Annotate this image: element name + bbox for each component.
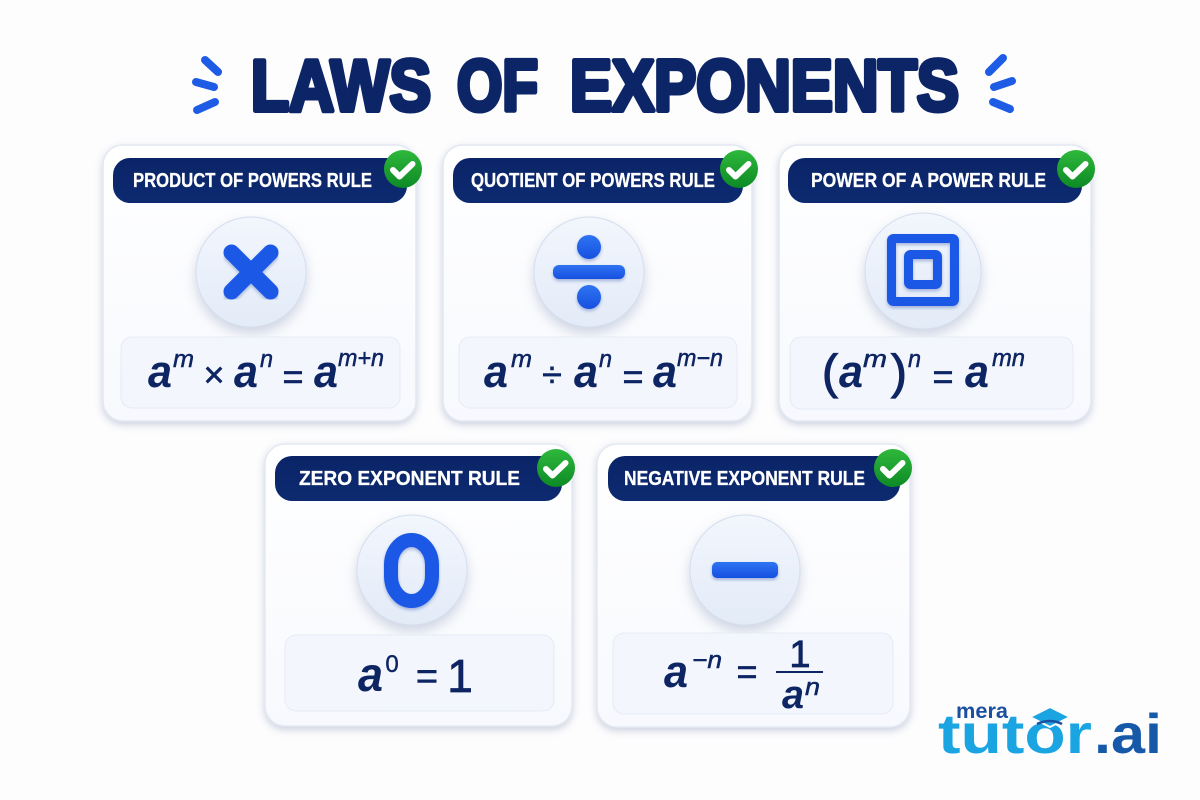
formula box: m−n: [677, 345, 723, 372]
formula box: =: [736, 651, 758, 692]
formula box: a: [148, 346, 172, 397]
panel: negative exponent rule: [597, 444, 912, 727]
icon: nested squares: [865, 213, 981, 329]
formula box: n: [908, 346, 921, 373]
icon: zero: [357, 515, 467, 625]
title text: OF: [457, 46, 538, 126]
formula box: −n: [692, 647, 722, 674]
icon: green check badge: [720, 150, 758, 188]
formula box: n: [260, 346, 273, 373]
panel: power of a power rule: [779, 145, 1095, 421]
icon: minus sign: [690, 515, 800, 625]
heading pill: ZERO EXPONENT RULE: [299, 468, 520, 490]
heading pill: [608, 456, 900, 501]
formula box: =: [932, 356, 954, 397]
panel: quotient of powers rule: [443, 145, 758, 421]
heading pill: [275, 456, 562, 501]
formula box: [613, 633, 893, 717]
formula box: m: [173, 346, 194, 373]
formula box: [790, 337, 1073, 409]
formula box: a: [664, 646, 688, 697]
logo: mera tutor.ai: tutor: [938, 702, 1092, 765]
formula box: (: [822, 345, 838, 398]
heading pill: PRODUCT OF POWERS RULE: [133, 170, 372, 192]
formula box: 1: [789, 634, 811, 676]
icon: right sparkle dashes: [989, 58, 1012, 109]
formula box: a: [574, 346, 598, 397]
formula box: 1: [447, 650, 473, 702]
formula box: =: [416, 656, 438, 698]
formula box: a: [358, 649, 383, 702]
card background: [779, 145, 1091, 421]
formula box: [285, 635, 554, 711]
heading pill: [113, 158, 407, 203]
formula box: 0: [385, 651, 399, 678]
formula box: a: [484, 346, 508, 397]
title text: EXPONENTS: [570, 46, 959, 126]
formula box: a: [234, 346, 258, 397]
card background: [443, 145, 752, 421]
heading pill: NEGATIVE EXPONENT RULE: [624, 468, 865, 490]
formula box: [121, 337, 400, 408]
logo: mera tutor.ai: .ai: [1094, 702, 1162, 765]
title text: [251, 46, 959, 126]
formula box: m: [863, 346, 887, 373]
formula box: m: [511, 346, 532, 373]
formula box: a: [839, 346, 863, 397]
formula box: ÷: [542, 354, 562, 395]
icon: green check badge: [874, 449, 912, 487]
card background: [103, 145, 416, 421]
formula box: =: [282, 356, 304, 397]
formula box: a: [653, 346, 677, 397]
icon: multiplication sign: [196, 217, 306, 327]
heading pill: [788, 158, 1082, 203]
heading pill: POWER OF A POWER RULE: [811, 170, 1046, 192]
icon: graduation cap: [1030, 707, 1070, 727]
formula box: a: [782, 673, 804, 717]
heading pill: [453, 158, 743, 203]
panel: zero exponent rule: [265, 444, 575, 726]
formula box: n: [805, 674, 820, 701]
formula box: ×: [203, 354, 225, 395]
card background: [265, 444, 572, 726]
title text: LAWS: [251, 46, 431, 126]
icon: division sign: [534, 217, 644, 327]
logo: mera tutor.ai: [938, 700, 1162, 765]
formula box: ): [891, 345, 907, 398]
title: [196, 46, 1012, 126]
icon: green check badge: [1057, 150, 1095, 188]
panel: product of powers rule: [103, 145, 422, 421]
formula box: [459, 337, 737, 408]
icon: green check badge: [384, 150, 422, 188]
heading pill: QUOTIENT OF POWERS RULE: [471, 170, 715, 192]
formula box: a: [314, 346, 338, 397]
formula box: n: [599, 346, 612, 373]
icon: left sparkle dashes: [196, 60, 218, 110]
icon: green check badge: [537, 449, 575, 487]
card background: [597, 444, 910, 727]
formula box: =: [622, 356, 644, 397]
formula box: mn: [992, 345, 1025, 372]
formula box: m+n: [338, 345, 384, 372]
logo: mera tutor.ai: mera: [956, 700, 1008, 723]
formula box: a: [965, 346, 989, 397]
